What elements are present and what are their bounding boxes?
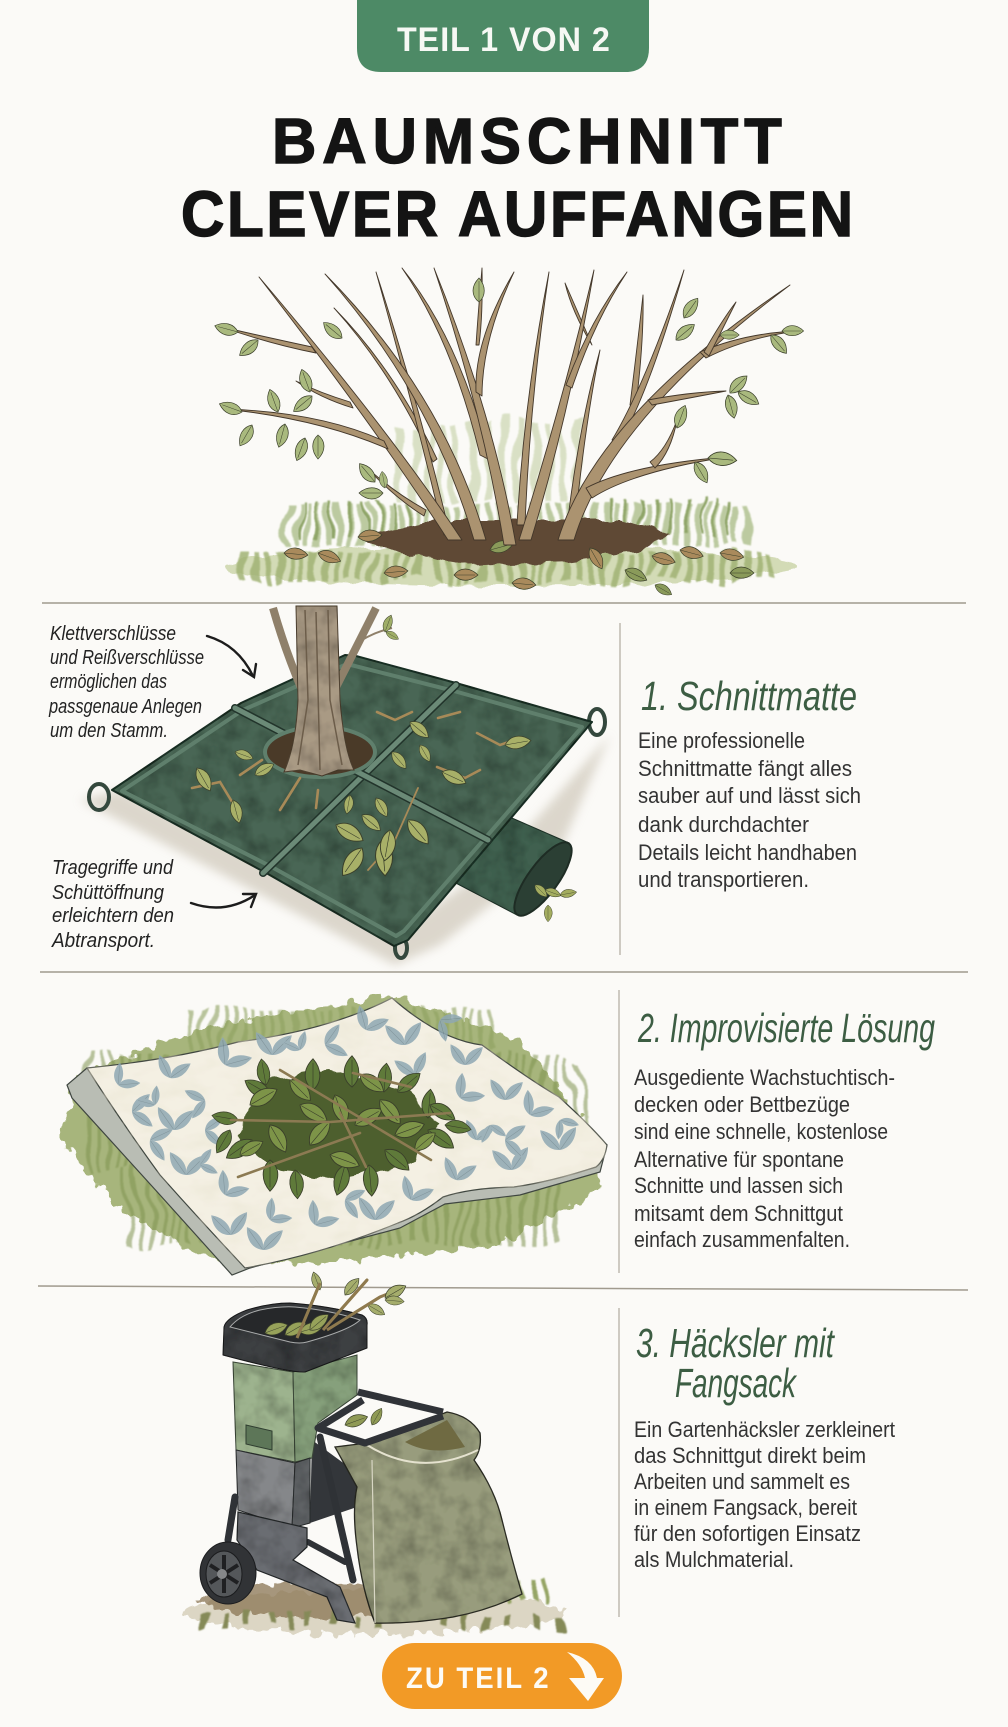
title bbox=[181, 106, 853, 250]
heading 3: Fangsack bbox=[675, 1360, 798, 1406]
button: Zu Teil 2: ZU TEIL 2 bbox=[406, 1662, 549, 1695]
illustration: shredder with catch bag bbox=[185, 1271, 565, 1634]
annotation: handles: erleichtern den bbox=[52, 905, 174, 927]
arrow to chute bbox=[191, 894, 256, 908]
pile of clippings bbox=[211, 1056, 472, 1199]
illustration: cutting mat around trunk bbox=[80, 606, 610, 965]
faint background foliage bbox=[395, 422, 590, 502]
grey body bbox=[236, 1450, 310, 1528]
body 1: dank durchdachter bbox=[638, 812, 809, 837]
annotation: fasteners: Klettverschlüsse bbox=[50, 623, 176, 645]
body 2: mitsamt dem Schnittgut bbox=[634, 1201, 843, 1226]
mat straps bbox=[235, 685, 488, 873]
annotation: handles: Abtransport. bbox=[51, 930, 155, 952]
annotation: handles: Schüttöffnung bbox=[52, 882, 164, 904]
divider 1 bbox=[42, 602, 966, 604]
heading 3: 3. Häcksler mit bbox=[636, 1320, 835, 1366]
cloth leaf pattern bbox=[106, 994, 583, 1261]
branches bbox=[222, 268, 797, 545]
body 2: decken oder Bettbezüge bbox=[634, 1092, 850, 1117]
body 3: Arbeiten und sammelt es bbox=[634, 1469, 850, 1494]
title: CLEVER AUFFANGEN bbox=[181, 179, 853, 250]
button: Zu Teil 2 bbox=[382, 1643, 622, 1709]
body 2: Alternative für spontane bbox=[634, 1147, 844, 1172]
body 1 bbox=[638, 728, 861, 892]
discharge chute bbox=[450, 815, 581, 923]
body 3: als Mulchmaterial. bbox=[634, 1547, 794, 1572]
twigs on mat bbox=[192, 712, 520, 870]
illustration: pruned shrub bbox=[213, 268, 804, 598]
body 1: und transportieren. bbox=[638, 867, 809, 892]
soil patch bbox=[185, 1582, 565, 1634]
carrying rings bbox=[89, 709, 605, 958]
icon: curved down arrow bbox=[567, 1652, 604, 1701]
green body bbox=[233, 1355, 357, 1462]
cloth folded edges bbox=[67, 1068, 607, 1275]
body 2 bbox=[634, 1065, 895, 1252]
heading 1: 1. Schnittmatte bbox=[641, 673, 857, 719]
body 3: Ein Gartenhäcksler zerkleinert bbox=[634, 1417, 895, 1442]
catch bag bbox=[335, 1412, 522, 1623]
mat hem bbox=[122, 664, 582, 936]
body 2: Schnitte und lassen sich bbox=[634, 1173, 843, 1198]
section 1 text bbox=[620, 623, 861, 955]
leaves on shrub bbox=[213, 278, 804, 499]
annotation: fasteners: ermöglichen das bbox=[50, 671, 167, 693]
body 2: Ausgediente Wachstuchtisch- bbox=[634, 1065, 895, 1090]
section 2 text bbox=[619, 990, 935, 1273]
body 2: sind eine schnelle, kostenlose bbox=[634, 1119, 888, 1144]
body 3: in einem Fangsack, bereit bbox=[634, 1495, 857, 1520]
tree trunk bbox=[273, 606, 400, 776]
arrow to mat fasteners bbox=[207, 636, 256, 677]
annotation: fasteners bbox=[48, 623, 204, 742]
body 1: Schnittmatte fängt alles bbox=[638, 756, 852, 781]
body 2: einfach zusammenfalten. bbox=[634, 1227, 850, 1252]
heading 3 bbox=[636, 1320, 835, 1406]
illustration: cloth on grass bbox=[62, 994, 607, 1275]
ground with grass and soil bbox=[225, 517, 795, 598]
annotation: fasteners: und Reißverschlüsse bbox=[50, 647, 204, 669]
annotation: handles bbox=[51, 857, 174, 952]
body 3: für den sofortigen Einsatz bbox=[634, 1521, 861, 1546]
body 3: das Schnittgut direkt beim bbox=[634, 1443, 866, 1468]
mat shadow bbox=[80, 735, 610, 965]
grass bbox=[62, 995, 600, 1265]
title: BAUMSCHNITT bbox=[272, 106, 782, 177]
body 3 bbox=[634, 1417, 895, 1572]
annotation: fasteners: um den Stamm. bbox=[50, 720, 168, 742]
brand label bbox=[246, 1425, 272, 1450]
chute frame bbox=[318, 1392, 443, 1443]
annotation: handles: Tragegriffe und bbox=[52, 857, 174, 879]
annotation: fasteners: passgenaue Anlegen bbox=[48, 696, 202, 718]
divider 2 bbox=[40, 971, 968, 973]
wheel bbox=[200, 1542, 256, 1604]
frame bbox=[228, 1437, 353, 1580]
header badge: Teil 1 von 2 bbox=[357, 0, 649, 72]
mat surface bbox=[112, 655, 592, 946]
cloth bbox=[87, 998, 607, 1268]
divider 3 bbox=[38, 1286, 968, 1290]
twigs in hopper bbox=[297, 1271, 408, 1338]
section 3 text bbox=[619, 1308, 895, 1617]
body 1: Details leicht handhaben bbox=[638, 840, 857, 865]
hopper bbox=[223, 1280, 380, 1372]
body 1: Eine professionelle bbox=[638, 728, 805, 753]
trunk opening bbox=[265, 727, 375, 777]
leg bbox=[237, 1512, 355, 1623]
dark rear body bbox=[310, 1440, 357, 1523]
header badge: Teil 1 von 2: TEIL 1 VON 2 bbox=[397, 21, 610, 59]
body 1: sauber auf und lässt sich bbox=[638, 783, 861, 808]
leaves on mat bbox=[192, 717, 532, 880]
